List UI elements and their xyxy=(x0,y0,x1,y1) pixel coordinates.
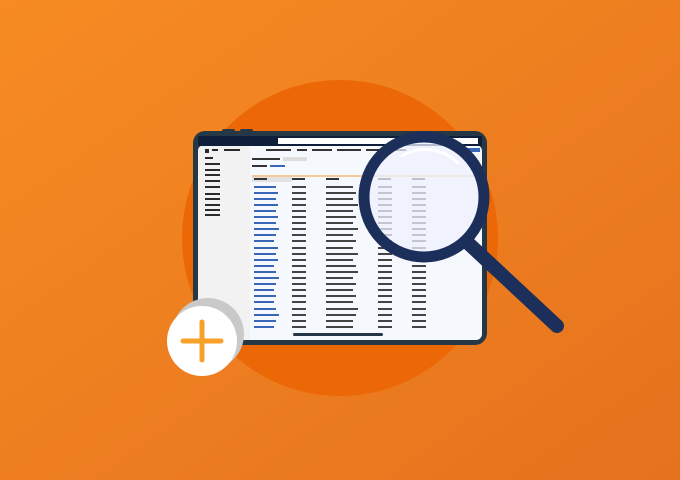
sidebar xyxy=(205,149,240,216)
tablet xyxy=(193,129,487,345)
plus badge xyxy=(167,298,244,376)
background circle xyxy=(182,80,498,396)
header row xyxy=(252,149,406,167)
magnifying glass xyxy=(364,137,557,326)
table rows xyxy=(254,186,426,328)
